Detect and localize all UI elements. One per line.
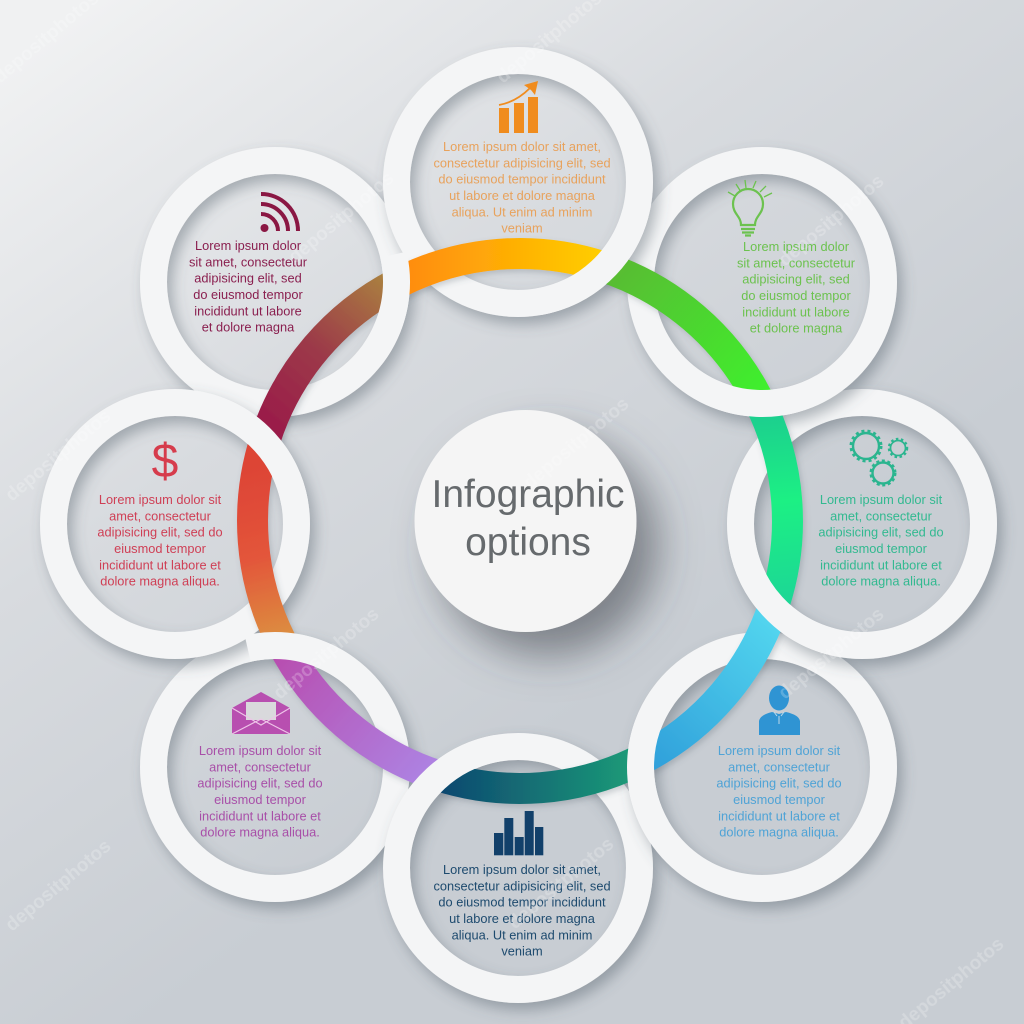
- ring: left: [54, 402, 296, 646]
- watermark text: depositphotos: [270, 604, 383, 704]
- text: left-bottom: amet, consectetur: [209, 759, 312, 774]
- ring: right: [740, 402, 984, 646]
- text: left-top: do eiusmod tempor: [193, 287, 304, 302]
- text: left-bottom: incididunt ut labore et: [199, 808, 321, 823]
- ring: right-bottom: [640, 646, 884, 888]
- text: bottom: consectetur adipisicing elit, sed: [433, 878, 611, 893]
- text: top: Lorem ipsum dolor sit amet,: [443, 139, 601, 154]
- center title: Infographic: [432, 473, 624, 516]
- text: right: eiusmod tempor: [835, 541, 928, 556]
- text: left: adipisicing elit, sed do: [97, 525, 223, 540]
- icon: gears: [851, 431, 907, 485]
- text: bottom: Lorem ipsum dolor sit amet,: [443, 862, 601, 877]
- text: bottom: aliqua. Ut enim ad minim: [452, 927, 592, 942]
- text: left-bottom: Lorem ipsum dolor sit: [199, 743, 322, 758]
- icon: dollar sign: $: [152, 435, 178, 488]
- text: left-top: Lorem ipsum dolor: [195, 238, 302, 253]
- text: right-top: incididunt ut labore: [742, 304, 850, 319]
- text: left-bottom: eiusmod tempor: [214, 792, 307, 807]
- text: right-top: Lorem ipsum dolor: [743, 239, 850, 254]
- text: bottom: ut labore et dolore magna: [449, 911, 596, 926]
- text: right-top: sit amet, consectetur: [737, 255, 856, 270]
- text: top: consectetur adipisicing elit, sed: [433, 155, 611, 170]
- ring: left-bottom: [154, 646, 396, 888]
- center circle: [414, 410, 636, 632]
- gradient ribbon woven through the rings: [253, 253, 787, 788]
- watermark text: depositphotos: [2, 836, 115, 936]
- watermark text: depositphotos: [2, 406, 115, 506]
- text: right: dolore magna aliqua.: [821, 574, 941, 589]
- text: right-bottom: incididunt ut labore et: [718, 808, 840, 823]
- text: bottom: do eiusmod tempor incididunt: [438, 895, 606, 910]
- watermark text: depositphotos: [775, 171, 888, 271]
- icon: wifi signal: [260, 194, 298, 232]
- text: right-bottom: amet, consectetur: [728, 759, 831, 774]
- icon: growth chart: [499, 81, 538, 133]
- ring: right-top: [640, 160, 884, 404]
- text: left-top: sit amet, consectetur: [189, 254, 308, 269]
- watermark text: depositphotos: [505, 834, 618, 934]
- center title: options: [465, 521, 591, 564]
- text: right-bottom: adipisicing elit, sed do: [716, 776, 842, 791]
- text: left-bottom: dolore magna aliqua.: [200, 825, 320, 840]
- text: right-top: adipisicing elit, sed: [742, 272, 850, 287]
- text: left-top: et dolore magna: [202, 320, 295, 335]
- text: left-bottom: adipisicing elit, sed do: [197, 776, 323, 791]
- ring sections passing over the ribbon: [206, 213, 831, 837]
- text: left: Lorem ipsum dolor sit: [99, 492, 222, 507]
- watermark text: depositphotos: [775, 604, 888, 704]
- text: right: Lorem ipsum dolor sit: [820, 492, 943, 507]
- text: right-top: et dolore magna: [750, 321, 843, 336]
- text: right-top: do eiusmod tempor: [741, 288, 852, 303]
- text: right-bottom: eiusmod tempor: [733, 792, 826, 807]
- text: right: adipisicing elit, sed do: [818, 525, 944, 540]
- text: right-bottom: Lorem ipsum dolor sit: [718, 743, 841, 758]
- text: left: eiusmod tempor: [114, 541, 207, 556]
- icon: light bulb: [728, 180, 772, 236]
- text: left-top: incididunt ut labore: [194, 303, 302, 318]
- text: top: do eiusmod tempor incididunt: [438, 172, 606, 187]
- text: left: amet, consectetur: [109, 508, 212, 523]
- ring: top: [396, 60, 640, 304]
- icon: businessman: [759, 686, 800, 735]
- ring: left-top: [154, 160, 396, 404]
- icon: bar chart: [494, 811, 543, 855]
- text: left: dolore magna aliqua.: [100, 574, 220, 589]
- text: bottom: veniam: [501, 944, 543, 959]
- text: left-top: adipisicing elit, sed: [194, 271, 302, 286]
- text: right: amet, consectetur: [830, 508, 933, 523]
- text: top: veniam: [501, 221, 543, 236]
- watermark text: depositphotos: [285, 168, 398, 268]
- text: right-bottom: dolore magna aliqua.: [719, 825, 839, 840]
- watermark text: depositphotos: [520, 394, 633, 494]
- text: right: incididunt ut labore et: [820, 557, 942, 572]
- ring: bottom: [396, 746, 640, 990]
- text: left: incididunt ut labore et: [99, 557, 221, 572]
- text: top: aliqua. Ut enim ad minim: [452, 204, 592, 219]
- icon: envelope: [232, 692, 290, 734]
- text: top: ut labore et dolore magna: [449, 188, 596, 203]
